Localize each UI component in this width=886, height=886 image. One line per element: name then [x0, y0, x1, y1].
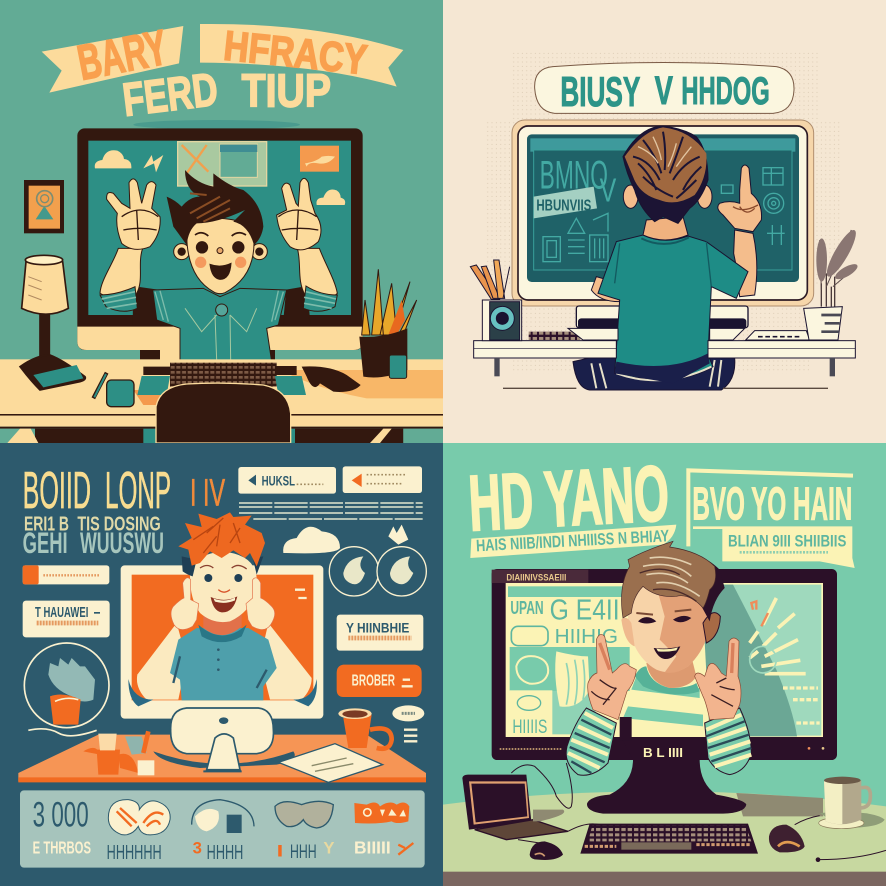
heading: large title: HD YANO: [467, 449, 671, 547]
neck: [646, 656, 696, 688]
orange desk: [18, 735, 426, 782]
dark sleeves behind body: [133, 287, 310, 325]
eyes, cheeks and mouth: [196, 242, 208, 253]
panel: bottom-left navy infographic poster: [0, 443, 443, 886]
monitor with orange screen: [121, 565, 323, 719]
right-hand screen art with sunburst: [703, 585, 821, 736]
right hand with pointing finger: [695, 638, 741, 720]
heading: rounded title sign: [535, 62, 794, 115]
right sleeve: [705, 708, 751, 775]
heading: ribbon banner with title: FERD: [120, 63, 221, 126]
on-screen text and icons: HBUNVIIS: [536, 198, 591, 215]
orange button: [337, 665, 422, 697]
right hand: [277, 178, 321, 250]
left sleeve: [566, 708, 616, 775]
goggles icon: [275, 801, 334, 863]
cup with pens on desk: [83, 731, 154, 775]
heading: ribbon banner with title: TIUP: [242, 65, 331, 117]
left arm: [591, 277, 620, 302]
left label cards: T HAUAWEI: [35, 605, 88, 621]
office chair: [156, 383, 291, 443]
heading: rounded title sign: BIUSY: [560, 68, 640, 115]
infinity icon: [107, 800, 170, 864]
shirt: [170, 628, 277, 700]
shirt torso: [620, 673, 706, 736]
desk: [0, 359, 443, 443]
coffee mug: [819, 777, 870, 829]
neck: [643, 217, 688, 240]
monitor stand: [171, 708, 273, 771]
boy seen from behind: [573, 126, 762, 390]
right arm: [297, 248, 337, 299]
neck: [203, 613, 242, 635]
monitor: [492, 569, 837, 760]
goggles icon: Y: [323, 839, 334, 858]
face details: [204, 574, 212, 582]
eyes and mouth: [638, 616, 691, 624]
top-right label cards: [238, 466, 423, 519]
keyboard and desk items: [93, 363, 361, 407]
circle with hand and orange cup: [24, 643, 109, 736]
bottom stats panel: E THRBOS: [33, 838, 91, 858]
heading: rounded title sign: HHDOG: [681, 69, 770, 113]
heading: large title: BLIAN 9III SHIIBIIS: [728, 531, 846, 550]
shirt: [153, 288, 287, 362]
top-right label cards: HUKSL: [262, 473, 295, 489]
heading: ribbon banner with title: [42, 20, 403, 126]
heading: title lines: TIS DOSING: [77, 512, 161, 535]
boy with raised hands: [100, 170, 337, 362]
computer monitor: [77, 128, 363, 367]
desk surface: [443, 791, 886, 886]
potted dried plant: [804, 227, 860, 340]
monitor: [512, 120, 814, 329]
cables: [511, 763, 886, 860]
orange badges: [354, 803, 413, 858]
heading: title lines: GEHI: [23, 527, 68, 560]
legs: [573, 353, 735, 390]
monitor stand: B L IIII: [643, 745, 683, 760]
cuffs: [128, 679, 317, 706]
hair: [623, 126, 708, 223]
ears: [621, 618, 635, 646]
face: [628, 580, 710, 672]
brain icon: 3: [193, 839, 202, 858]
right arm sleeve: [303, 286, 337, 311]
on-screen text: [510, 595, 630, 738]
t-shirt: [598, 235, 748, 379]
arms: [137, 623, 187, 700]
on-screen text: UPAN: [510, 597, 544, 618]
goggles icon: HHH: [290, 842, 317, 863]
heading: rounded title sign: V: [655, 69, 673, 113]
on-screen text and icons: BMNO: [540, 153, 608, 197]
monitor stand: [587, 738, 746, 814]
framed picture on wall: [24, 180, 64, 233]
head: [190, 551, 257, 622]
on-screen text and icons: V: [600, 173, 617, 210]
heading: title lines: LONP: [105, 461, 171, 519]
keyboard: [580, 824, 758, 854]
monitor: DIAIINIVSSAEIII: [506, 573, 566, 583]
brain icon: HHHH: [207, 841, 243, 864]
on-screen text: G E4II: [550, 595, 620, 627]
left arm sleeve: [100, 287, 137, 311]
heading: ribbon banner with title: BARY: [73, 20, 172, 91]
laptop: [462, 775, 568, 840]
heading: title lines: WUUSWU: [80, 527, 164, 560]
hands: [171, 578, 199, 630]
table lamp: [20, 255, 85, 390]
raised arm and hand pointing: [734, 230, 757, 297]
panel: top-left teal poster: [0, 0, 443, 443]
red hair: [178, 512, 265, 566]
panel: bottom-right mint poster: [443, 443, 886, 886]
computer mice: [530, 825, 820, 862]
desk shelf: [474, 341, 855, 388]
left hand: [107, 179, 160, 249]
right label card: Y HIINBHIE: [346, 619, 409, 635]
ears: [623, 185, 638, 208]
heading: large title: HAIS NIIB/INDI NHIIISS N BHIAY: [476, 526, 670, 555]
heading: ribbon banner with title: HFRACY: [222, 22, 369, 83]
pencil cup with speaker: [470, 260, 522, 341]
bottom stats panel: [20, 790, 425, 868]
small oval label: [392, 705, 424, 741]
on-screen text and icons: [534, 153, 785, 262]
panel: top-right cream poster: [443, 0, 886, 443]
left label cards: [23, 565, 110, 637]
on-screen icons and windows: [95, 142, 345, 205]
boy with striped shirt: [566, 541, 751, 775]
desk keyboard and tray: [529, 328, 810, 340]
orange button: BROBER: [352, 672, 395, 689]
infinity icon: HHHHHH: [107, 841, 162, 864]
right label card: [337, 615, 423, 651]
dotted halftone background: [486, 52, 840, 373]
on-screen text: HIIHIG: [555, 625, 618, 648]
orange badges: BIIIII: [354, 838, 391, 858]
left arm: [100, 248, 143, 300]
ears: [174, 244, 190, 260]
heading: title lines: I IV: [190, 471, 225, 514]
notebook on desk: [278, 744, 383, 782]
large coffee mug: [338, 708, 392, 749]
heading: title lines: BOIID: [23, 461, 91, 519]
cloud and hand icons: [283, 525, 426, 596]
heading: title lines: ERI1 B: [24, 512, 69, 535]
face: [187, 218, 254, 294]
hair: [167, 170, 263, 245]
boy with red hair: [128, 512, 317, 706]
brain icon: [192, 800, 254, 864]
bottom stats panel: 3 000: [33, 795, 89, 834]
plant pot with yellow leaves: [359, 269, 417, 378]
heading: title lines: [23, 461, 225, 560]
on-screen text: HIIIIS: [512, 717, 547, 738]
hair: [676, 558, 725, 621]
goggles icon: I: [277, 841, 283, 860]
left hand with pointing finger: [588, 634, 636, 720]
